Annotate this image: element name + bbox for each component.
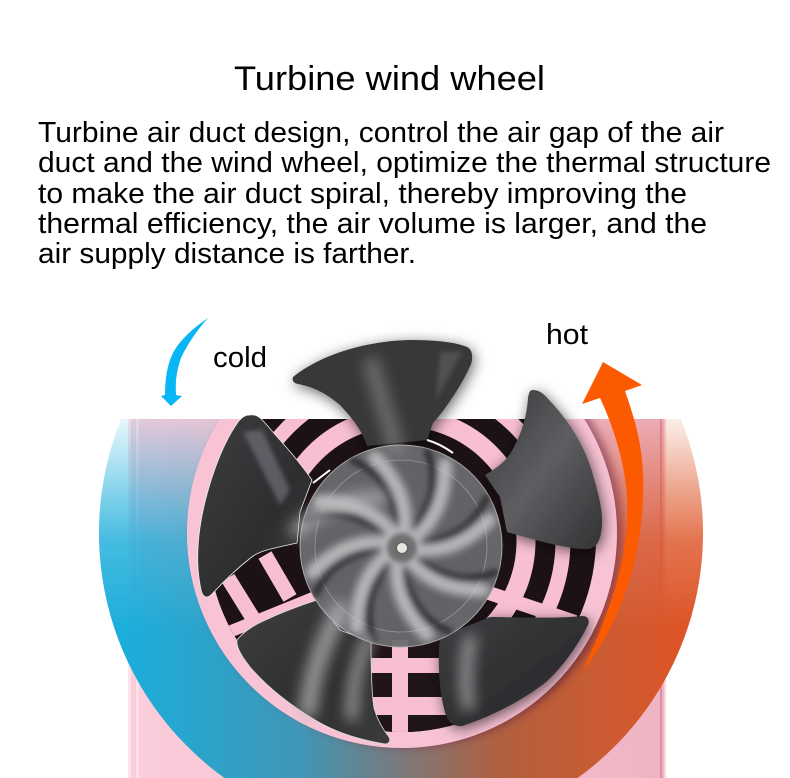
description text block: thermal efficiency, the air volume is larger, and the — [38, 208, 707, 240]
hub centre shaft — [387, 533, 417, 563]
blade motion streaks — [296, 365, 470, 715]
cold label: cold — [213, 342, 267, 374]
blue cold arrow — [161, 318, 208, 406]
hot label: hot — [546, 319, 588, 351]
hub rim — [315, 460, 487, 632]
blade: upper right — [485, 390, 602, 549]
blade: lower left — [237, 600, 390, 744]
rim highlights — [313, 440, 453, 483]
blade: top — [293, 340, 472, 446]
hub disc — [300, 445, 502, 647]
blade: upper left — [198, 415, 312, 597]
swirl dark bands — [307, 452, 495, 640]
swirl motion blur — [313, 458, 489, 634]
fan wheel — [198, 340, 602, 744]
description text block — [38, 117, 771, 270]
description text block: air supply distance is farther. — [38, 238, 416, 270]
orange hot arrow — [582, 362, 643, 672]
description text block: to make the air duct spiral, thereby improving the — [38, 178, 687, 210]
description text block: duct and the wind wheel, optimize the thermal structure — [38, 147, 771, 179]
fan housing with grille — [187, 419, 626, 752]
pink fan body — [128, 419, 666, 778]
gradient airflow ring — [99, 419, 703, 778]
description text block: Turbine air duct design, control the air gap of the air — [38, 117, 725, 149]
title: Turbine wind wheel — [234, 60, 545, 98]
blade: lower right — [439, 616, 589, 726]
